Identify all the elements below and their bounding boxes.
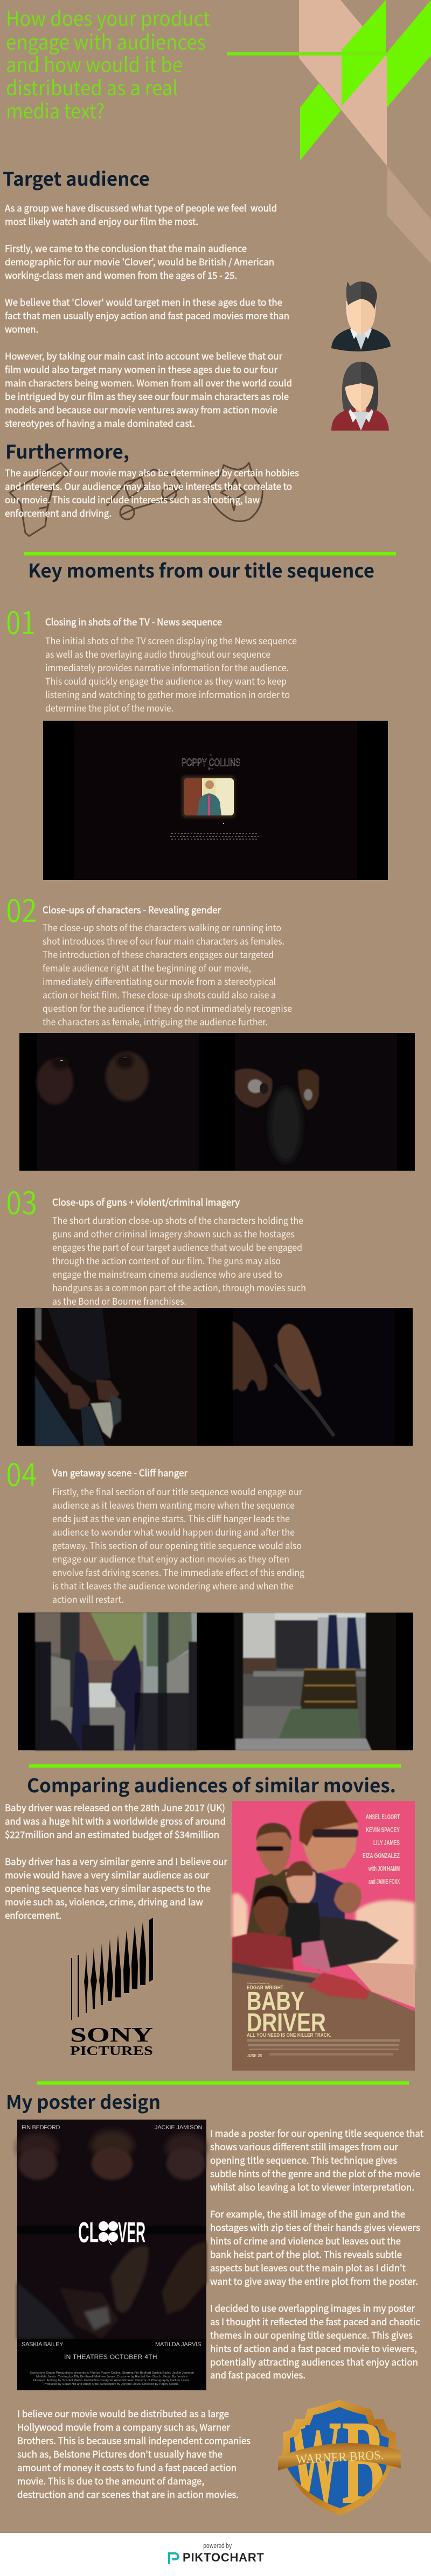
- poster: baby driver: [232, 1801, 415, 2071]
- moment 03 text: through the action content of our film. The guns may also: [52, 1254, 281, 1267]
- image: masked character close-ups: [19, 1033, 415, 1171]
- text block: baby driver: [5, 1800, 227, 1922]
- poster: clover: VER: [118, 2216, 145, 2249]
- moment 02 text: question for the audience if they do not immediately recognise: [43, 1001, 292, 1015]
- text block: poster design: For example, the still image of the gun and the: [210, 2207, 405, 2220]
- text block: poster design: aspects but leaves out the main plot as I didn't: [210, 2261, 406, 2274]
- text block: furthermore: [5, 466, 299, 519]
- poster: clover: IN THEATRES OCTOBER 4TH: [64, 2353, 157, 2361]
- moment 01 text: determine the plot of the movie.: [45, 701, 173, 714]
- logo: sony pictures: SONY: [70, 2024, 153, 2046]
- moment 02 text: The close-up shots of the characters walking or running into: [43, 920, 281, 934]
- moment 01 text: This could quickly engage the audience as they want to keep: [45, 674, 287, 687]
- image: hostages and gun: [17, 1308, 413, 1446]
- footer: [0, 2533, 431, 2576]
- moment 01 text: immediately provides narrative information for the audience.: [45, 660, 289, 674]
- moment 04 text: ends just as the van engine starts. This cliff hanger leads the: [52, 1511, 290, 1525]
- text block: distribution: I believe our movie would be distributed as a large: [17, 2406, 229, 2420]
- heading: key moments: Key moments from our title sequence: [28, 556, 374, 583]
- moment 04 text: envolve fast driving scenes. The immediate effect of this ending: [52, 1565, 304, 1579]
- text block: target audience: film would also target many women in these ages due to our four: [5, 362, 277, 376]
- text block: baby driver: Baby driver was released on the 28th June 2017 (UK): [5, 1800, 225, 1814]
- poster: baby driver: JUNE 28: [247, 2053, 262, 2058]
- text block: poster design: shows various different still images from our: [210, 2139, 398, 2153]
- poster: baby driver: BABY: [247, 1987, 304, 2016]
- moment 03 text: handguns as a common part of the action, through movies such: [52, 1280, 306, 1294]
- text block: target audience: working-class men and women from the ages of 15 - 25.: [5, 268, 237, 281]
- text block: poster design: potentially attracting audiences that enjoy action: [210, 2355, 418, 2368]
- moment 04 text: Van getaway scene - Cliff hanger: [52, 1466, 187, 1480]
- logo: warner bros shield: B: [342, 2395, 385, 2529]
- poster: clover: [17, 2120, 206, 2390]
- text block: furthermore: The audience of our movie may also be determined by certain hobbies: [5, 466, 299, 479]
- text block: distribution: Brothers. This is because small independent companies: [17, 2433, 251, 2447]
- moment 01 text: listening and watching to gather more information in order to: [45, 687, 290, 701]
- moment 02 text: Close-ups of characters - Revealing gender: [43, 903, 221, 917]
- text block: target audience: fact that men usually enjoy action and fast paced movies more than: [5, 308, 289, 322]
- poster: baby driver: and JAMIE FOXX: [369, 1877, 400, 1885]
- heading: target audience: Target audience: [3, 164, 150, 192]
- poster: clover: Produced by Sarah Hill and Adam Ottill. Screenplay by Jerome Davis. Directed by Poppy Collins.: [44, 2383, 179, 2386]
- poster: baby driver: EDGAR WRIGHT: [247, 1985, 283, 1991]
- moment 02 text: The introduction of these characters engages our targeted: [43, 947, 274, 961]
- moment 04 text: action will restart.: [52, 1592, 124, 1606]
- number 03: 03: [6, 1177, 37, 1224]
- text block: poster design: hostages with zip ties of their hands gives viewers: [210, 2220, 420, 2234]
- moment 04 text: Firstly, the final section of our title sequence would engage our: [52, 1484, 302, 1498]
- poster: baby driver: ALL YOU NEED IS ONE KILLER TRACK.: [247, 2032, 331, 2038]
- text block: poster design: subtle hints of the genre and the plot of the movie: [210, 2166, 420, 2180]
- moment 04 text: audience as it leaves them wanting more when the sequence: [52, 1498, 295, 1511]
- text block: distribution: [17, 2406, 251, 2501]
- number 01: 01: [6, 597, 36, 644]
- title: [6, 2, 210, 124]
- text block: target audience: be intrigued by our film as they see our four main characters as role: [5, 389, 289, 403]
- title: media text?: [6, 95, 105, 124]
- text block: poster design: hints of action and a fast paced movie to viewers,: [210, 2341, 417, 2355]
- moment 03 text: [52, 1195, 306, 1307]
- image: TV news still: film: [208, 768, 214, 771]
- text block: poster design: I made a poster for our opening title sequence that: [210, 2126, 424, 2139]
- text block: distribution: movie. This is due to the amount of damage,: [17, 2474, 204, 2487]
- logo: sony pictures: [70, 1918, 153, 2058]
- text block: baby driver: Baby driver has a very similar genre and I believe our: [5, 1854, 227, 1868]
- poster: baby driver: Written and Directed by: [247, 1982, 269, 1984]
- poster: clover: MATILDA JARVIS: [155, 2341, 201, 2348]
- text block: baby driver: and was a huge hit with a worldwide gross of around: [5, 1814, 226, 1827]
- text block: poster design: and fast paced movies.: [210, 2368, 305, 2381]
- poster: clover: Florence. Editing by Scarlett Webb. Production Designer Anna Rimmer. Director of Photography Callum Lewis.: [33, 2379, 190, 2382]
- title: How does your product: [6, 2, 210, 32]
- moment 03 text: engages the part of our target audience that would be engaged: [52, 1240, 302, 1254]
- number 04: 04: [6, 1449, 37, 1496]
- poster: clover: CL: [78, 2216, 99, 2249]
- text block: furthermore: enforcement and driving.: [5, 506, 112, 519]
- text block: target audience: [5, 201, 292, 430]
- text block: poster design: whilst also leaving a lot to viewer interpretation.: [210, 2180, 414, 2193]
- text block: poster design: hints of crime and violence but leaves out the: [210, 2234, 401, 2247]
- image: TV news still: a: [210, 754, 212, 757]
- moment 02 text: female audience right at the beginning of our movie,: [43, 961, 251, 974]
- poster: clover: Sandstone Studio Productions presents a Film by Poppy Collins. Starring Fin Bedford Saskia Bailey Jackie Jamison: [30, 2371, 194, 2375]
- moment 01 text: [45, 615, 297, 714]
- text block: poster design: bank heist part of the plot. This reveals subtle: [210, 2247, 402, 2261]
- moment 02 text: shot introduces three of our four main characters as females.: [43, 934, 284, 947]
- poster: clover: Matilda Jarvis. Casting by Tilly Brothwell Mathew Jones. Costume by Rachel Von Dutch. Music By Jessica: [36, 2375, 187, 2378]
- text block: furthermore: and interests. Our audience may also have interests that correlate to: [5, 479, 292, 492]
- logo: warner bros shield: W: [289, 2395, 342, 2529]
- decorative geometric shapes: [227, 0, 431, 264]
- moment 02 text: action or heist film. These close-up shots could also raise a: [43, 988, 276, 1001]
- text block: target audience: Firstly, we came to the conclusion that the main audience: [5, 241, 247, 255]
- moment 03 text: Close-ups of guns + violent/criminal imagery: [52, 1195, 240, 1209]
- icon: man: [331, 281, 391, 351]
- poster: clover: JACKIE JAMISON: [155, 2124, 203, 2131]
- poster: baby driver: KEVIN SPACEY: [366, 1826, 400, 1834]
- text block: distribution: amount of money it costs to fund a fast paced action: [17, 2460, 237, 2474]
- moment 04 text: audience to wonder what would happen during and after the: [52, 1525, 295, 1538]
- text block: target audience: We believe that 'Clover' would target men in these ages due to the: [5, 295, 282, 308]
- moment 02 text: the characters as female, intriguing the audience further.: [43, 1015, 268, 1028]
- moment 04 text: is that it leaves the audience wondering where and when the: [52, 1579, 294, 1592]
- text block: poster design: opening title sequence. This technique gives: [210, 2153, 397, 2166]
- moment 02 text: immediately differentiating our movie from a stereotypical: [43, 974, 276, 988]
- poster: baby driver: DRIVER: [247, 2009, 326, 2037]
- text block: distribution: such as, Belstone Pictures don't usually have the: [17, 2447, 223, 2460]
- number 02: 02: [6, 885, 37, 932]
- logo: warner bros shield: WARNER BROS.: [296, 2448, 384, 2467]
- heading: my poster design: My poster design: [6, 2087, 161, 2115]
- moment 01 text: Closing in shots of the TV - News sequence: [45, 615, 222, 629]
- text block: baby driver: enforcement.: [5, 1908, 61, 1922]
- text block: target audience: stereotypes of having a male dominated cast.: [5, 416, 195, 430]
- moment 02 text: [43, 903, 292, 1028]
- text block: poster design: [210, 2126, 424, 2381]
- title: engage with audiences: [6, 26, 206, 55]
- image: TV news still: [43, 721, 388, 880]
- icon: shield: [207, 463, 262, 521]
- moment 01 text: The initial shots of the TV screen displaying the News sequence: [45, 634, 297, 647]
- moment 04 text: [52, 1466, 304, 1606]
- poster: clover: SASKIA BAILEY: [22, 2341, 64, 2348]
- text block: baby driver: movie such as, violence, crime, driving and law: [5, 1895, 203, 1908]
- text block: target audience: models and because our movie ventures away from action movie: [5, 403, 277, 416]
- moment 03 text: The short duration close-up shots of the characters holding the: [52, 1213, 303, 1227]
- moment 03 text: guns and other criminal imagery shown such as the hostages: [52, 1227, 295, 1240]
- icon: woman: [331, 362, 389, 431]
- image: van getaway stills: [18, 1613, 413, 1750]
- poster: clover: FIN BEDFORD: [22, 2124, 60, 2131]
- title: and how would it be: [6, 48, 183, 78]
- text block: baby driver: $227million and an estimated budget of $34million: [5, 1827, 219, 1841]
- logo: sony pictures: PICTURES: [70, 2044, 153, 2058]
- text block: target audience: main characters being women. Women from all over the world could: [5, 376, 292, 389]
- text block: poster design: as I thought it reflected the fast paced and chaotic: [210, 2314, 420, 2328]
- moment 03 text: engage the mainstream cinema audience who are used to: [52, 1267, 282, 1280]
- text block: furthermore: our movie. This could include interests such as shooting, law: [5, 492, 260, 506]
- heading: furthermore: Furthermore,: [5, 437, 129, 464]
- footer: PIKTOCHART: [183, 2551, 265, 2564]
- poster: baby driver: ANSEL ELGORT: [366, 1813, 400, 1821]
- footer: powered by: [203, 2540, 232, 2550]
- image: TV news still: POPPY COLLINS: [182, 757, 240, 769]
- moment 03 text: as the Bond or Bourne franchises.: [52, 1294, 186, 1307]
- text block: target audience: demographic for our movie 'Clover', would be British / American: [5, 255, 274, 268]
- text block: distribution: destruction and car scenes that are in action movies.: [17, 2487, 239, 2501]
- poster: baby driver: EIZA GONZALEZ: [363, 1852, 400, 1860]
- text block: target audience: As a group we have discussed what type of people we feel would: [5, 201, 277, 214]
- poster: baby driver: LILY JAMES: [373, 1839, 400, 1847]
- moment 01 text: as well as the overlaying audio throughout our sequence: [45, 647, 270, 660]
- text block: target audience: However, by taking our main cast into account we believe that our: [5, 349, 282, 362]
- text block: baby driver: movie would have a very similar audience as our: [5, 1868, 209, 1881]
- text block: baby driver: opening sequence has very similar aspects to the: [5, 1881, 211, 1895]
- moment 04 text: engage our audience that enjoy action movies as they often: [52, 1552, 289, 1565]
- heading: comparing audiences: Comparing audiences of similar movies.: [27, 1771, 396, 1798]
- text block: poster design: themes in our opening title sequence. This gives: [210, 2328, 413, 2341]
- moment 04 text: getaway. This section of our opening title sequence would also: [52, 1538, 302, 1552]
- icon: gun: [10, 463, 69, 536]
- text block: distribution: Hollywood movie from a company such as, Warner: [17, 2420, 230, 2433]
- text block: poster design: I decided to use overlapping images in my poster: [210, 2301, 415, 2314]
- text block: poster design: want to give away the entire plot from the poster.: [210, 2274, 418, 2288]
- text block: target audience: women.: [5, 322, 38, 335]
- icon: car: [107, 469, 182, 519]
- text block: target audience: most likely watch and enjoy our film the most.: [5, 214, 198, 228]
- title: distributed as a real: [6, 72, 178, 101]
- poster: baby driver: with JON HAMM: [368, 1864, 400, 1873]
